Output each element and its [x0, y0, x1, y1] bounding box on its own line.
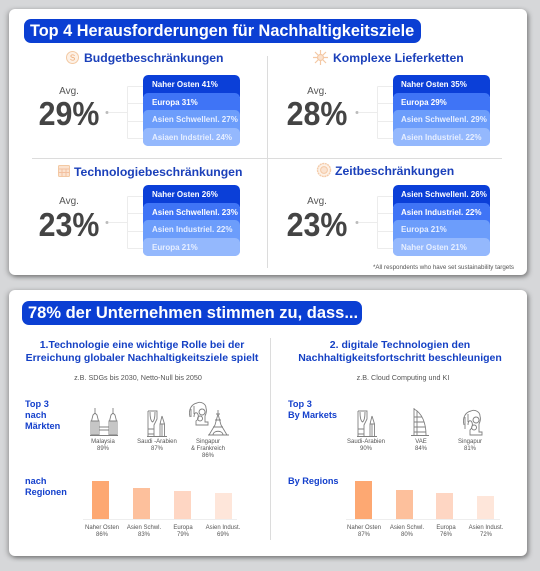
- regional ranking: [143, 75, 240, 146]
- label: top markets: nach: [25, 410, 46, 420]
- icon: Riyadh towers: [147, 410, 167, 437]
- caption: Saudi-Arabien: 87%: [151, 446, 163, 452]
- regional ranking: Asien Industriel. 22%: [401, 133, 481, 142]
- regional ranking: Asien Schwellenl. 26%: [401, 190, 487, 199]
- regional ranking: Asien Industriel. 22%: [401, 208, 481, 217]
- icon: supply network: [313, 50, 328, 65]
- label: top markets: Top 3: [25, 399, 49, 409]
- average label: Avg.: [59, 86, 79, 97]
- regional ranking: [143, 185, 240, 256]
- label: top markets: By Markets: [288, 410, 337, 420]
- bar chart: regions: 76%: [440, 532, 452, 538]
- bar chart: regions: [83, 481, 240, 538]
- examples 2: z.B. Cloud Computing und KI: [357, 373, 449, 382]
- caption: Singapur: [458, 438, 482, 452]
- connector: [356, 86, 393, 139]
- panel: technology role: [25, 339, 258, 538]
- average label: Avg.: [307, 86, 327, 97]
- bar chart: regions: 80%: [401, 532, 413, 538]
- caption: Malaysia: [91, 438, 115, 452]
- bar chart: regions: Naher Osten: [85, 525, 119, 531]
- regional ranking: [393, 185, 490, 256]
- regional ranking: Asiaen Indstriel. 24%: [152, 133, 232, 142]
- bar chart: regions: [346, 481, 503, 538]
- panel: 78% of companies agree: [9, 290, 527, 556]
- bar chart: regions: Asien Schwl.: [390, 525, 424, 531]
- bar chart: regions: 69%: [217, 532, 229, 538]
- regional ranking: Europa 21%: [401, 225, 447, 234]
- heading: time: Zeitbeschränkungen: [335, 164, 454, 178]
- bar chart: regions: 83%: [138, 532, 150, 538]
- label: regions: nach: [25, 476, 46, 486]
- caption: VAE: [415, 438, 427, 452]
- heading: supply chains: Komplexe Lieferketten: [333, 51, 464, 65]
- bar chart: regions: 79%: [177, 532, 189, 538]
- bar chart: regions: 86%: [96, 532, 108, 538]
- caption: Singapur and Frankreich: Singapur: [196, 439, 220, 445]
- average value: 28%: [287, 95, 347, 132]
- subheading 1: Erreichung globaler Nachhaltigkeitsziele spielt: [26, 352, 258, 364]
- connector: [106, 196, 143, 249]
- caption: Saudi-Arabien: Saudi -Arabien: [137, 439, 177, 445]
- label: regions: [25, 476, 67, 497]
- bar chart: regions: 72%: [480, 532, 492, 538]
- average label: Avg.: [307, 196, 327, 207]
- bar chart: regions: 87%: [358, 532, 370, 538]
- subheading 1: [26, 339, 258, 364]
- average value: 23%: [39, 206, 99, 243]
- average value: 23%: [287, 206, 347, 243]
- regional ranking: Naher Osten 21%: [401, 243, 467, 252]
- regional ranking: Asien Schwellenl. 29%: [401, 115, 487, 124]
- bar chart: regions: Naher Osten: [347, 525, 381, 531]
- panel: budget constraints: [39, 51, 240, 146]
- caption: Saudi-Arabien: 90%: [360, 446, 372, 452]
- heading: technology: Technologiebeschränkungen: [74, 165, 242, 179]
- label: top markets: [288, 399, 337, 420]
- caption: Singapur and Frankreich: & Frankreich: [191, 446, 225, 452]
- caption: Malaysia: 89%: [97, 446, 109, 452]
- average label: Avg.: [59, 196, 79, 207]
- caption: Singapur: Singapur: [458, 439, 482, 445]
- caption: Saudi-Arabien: [347, 438, 385, 452]
- caption: Malaysia: Malaysia: [91, 439, 115, 445]
- regional ranking: Naher Osten 35%: [401, 80, 467, 89]
- icon: Riyadh towers: [357, 410, 377, 437]
- icon: clock: [316, 162, 332, 178]
- regional ranking: Europa 29%: [401, 98, 447, 107]
- icon: Burj Al Arab: [411, 408, 429, 436]
- label: top markets: Top 3: [288, 399, 312, 409]
- regional ranking: Asien Schwellenl. 27%: [152, 115, 238, 124]
- bar chart: regions: Europa: [436, 525, 456, 531]
- label: top markets: [25, 399, 60, 431]
- panel: top 4 challenges: [9, 9, 527, 275]
- panel: complex supply chains: [287, 50, 490, 146]
- caption: VAE: VAE: [415, 439, 427, 445]
- heading: budget: Budgetbeschränkungen: [84, 51, 224, 65]
- icon: Petronas towers: [90, 408, 118, 436]
- regional ranking: Naher Osten 26%: [152, 190, 218, 199]
- regional ranking: [393, 75, 490, 146]
- label: regions: By Regions: [288, 476, 339, 486]
- caption: VAE: 84%: [415, 446, 427, 452]
- footnote: *All respondents who have set sustainability targets: [373, 264, 514, 271]
- panel: technology constraints: [39, 165, 242, 256]
- subheading 1: 1.Technologie eine wichtige Rolle bei der: [40, 339, 244, 351]
- caption: Saudi-Arabien: [137, 438, 177, 452]
- subheading 2: Nachhaltigkeitsfortschritt beschleunigen: [298, 352, 502, 364]
- bar chart: regions: Asien Schwl.: [127, 525, 161, 531]
- icon: Merlion: [463, 410, 482, 436]
- regional ranking: Europa 31%: [152, 98, 198, 107]
- title: top 4 challenges: Top 4 Herausforderungen für Nachhaltigkeitsziele: [30, 22, 414, 40]
- examples 1: z.B. SDGs bis 2030, Netto-Null bis 2050: [74, 373, 202, 382]
- subheading 2: 2. digitale Technologien den: [330, 339, 470, 351]
- connector: [356, 196, 393, 249]
- panel: time constraints: [287, 162, 514, 271]
- caption: Saudi-Arabien: Saudi-Arabien: [347, 439, 385, 445]
- icon: coin: [66, 51, 79, 64]
- label: regions: Regionen: [25, 487, 67, 497]
- regional ranking: Asien Industriel. 22%: [152, 225, 232, 234]
- panel: digital technologies: [288, 339, 503, 538]
- icon: coin: S: [70, 54, 75, 62]
- bar chart: regions: Asien Indust.: [206, 525, 240, 531]
- connector: [106, 86, 143, 139]
- subheading 2: [298, 339, 502, 364]
- caption: Singapur: 81%: [464, 446, 476, 452]
- regional ranking: Naher Osten 41%: [152, 80, 218, 89]
- caption: Singapur and Frankreich: [191, 438, 225, 459]
- caption: Singapur and Frankreich: 86%: [202, 453, 214, 459]
- icon: table: [58, 165, 70, 177]
- regional ranking: Europa 21%: [152, 243, 198, 252]
- average value: 29%: [39, 95, 99, 132]
- label: top markets: Märkten: [25, 421, 60, 431]
- bar chart: regions: Europa: [173, 525, 193, 531]
- icon: Merlion and Eiffel tower: [189, 402, 229, 436]
- bar chart: regions: Asien Indust.: [469, 525, 503, 531]
- regional ranking: Asien Schwellenl. 23%: [152, 208, 238, 217]
- title: 78% agree: 78% der Unternehmen stimmen zu, dass...: [28, 304, 358, 322]
